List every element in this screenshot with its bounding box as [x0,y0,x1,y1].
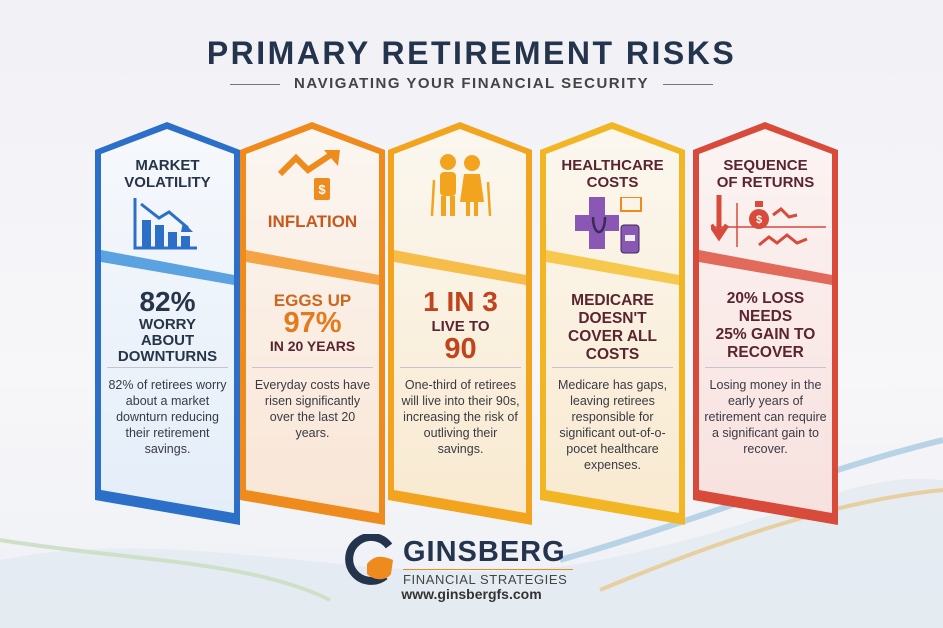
icon: G logo [345,534,393,585]
description: Losing money in the early years of retirement can require a significant gain to recover. [704,378,827,456]
icon: falling bar chart [134,198,197,250]
icon: money bag with falling arrows [711,195,826,247]
panel: inflation [252,150,373,440]
heading: COSTS [587,174,638,191]
stat: 20% LOSS [727,290,804,307]
icon: money bag with falling arrows: $ [756,214,762,226]
stat [716,290,815,361]
stat [568,292,657,363]
heading: SEQUENCE [723,157,808,174]
description: 82% of retirees worry about a market downturn reducing their retirement savings. [108,378,227,456]
description: One-third of retirees will live into their 90s, increasing the risk of outliving their savings. [401,378,520,456]
heading [124,157,211,191]
title: PRIMARY RETIREMENT RISKS [207,35,736,71]
icon: medical cross [575,197,642,254]
panel: longevity [400,154,521,456]
panel: market volatility: WORRY [139,316,196,333]
stat: NEEDS [739,308,792,325]
logo [345,534,573,587]
heading: HEALTHCARE [561,157,664,174]
panel: longevity: 90 [444,333,477,365]
description: Everyday costs have risen significantly over the last 20 years. [255,378,370,440]
description: Medicare has gaps, leaving retirees responsible for significant out-of-o-pocet healthcare expenses. [558,378,667,472]
brand name: GINSBERG [403,536,566,568]
heading [717,157,814,191]
stat: COSTS [586,346,639,363]
heading: MARKET [135,157,200,174]
heading: OF RETURNS [717,174,814,191]
stat: EGGS UP [274,291,351,310]
heading: VOLATILITY [124,174,211,191]
stat: RECOVER [727,344,804,361]
stat: 1 IN 3 [423,286,498,317]
logo: FINANCIAL STRATEGIES [403,572,567,587]
panel: inflation: 97% [283,307,342,339]
subtitle: NAVIGATING YOUR FINANCIAL SECURITY [294,75,649,92]
stat: MEDICARE [571,292,654,309]
stat: COVER ALL [568,328,657,345]
icon: rising arrow with price tag: $ [318,182,326,197]
website: www.ginsbergfs.com [401,586,542,602]
panel: market volatility: ABOUT [141,332,194,349]
stat: DOESN'T [578,310,647,327]
panel: inflation: IN 20 YEARS [270,338,355,354]
panel: market volatility: DOWNTURNS [118,348,217,365]
icon: elderly couple [430,154,492,216]
heading [561,157,664,191]
stat: 25% GAIN TO [716,326,815,343]
panel: market volatility [107,157,228,456]
stat: 82% [139,286,196,317]
panel: healthcare [552,157,673,472]
heading: INFLATION [268,212,357,231]
panel: sequence of returns [704,157,827,456]
icon: rising arrow with price tag [278,150,340,200]
panel: longevity: LIVE TO [431,318,490,335]
